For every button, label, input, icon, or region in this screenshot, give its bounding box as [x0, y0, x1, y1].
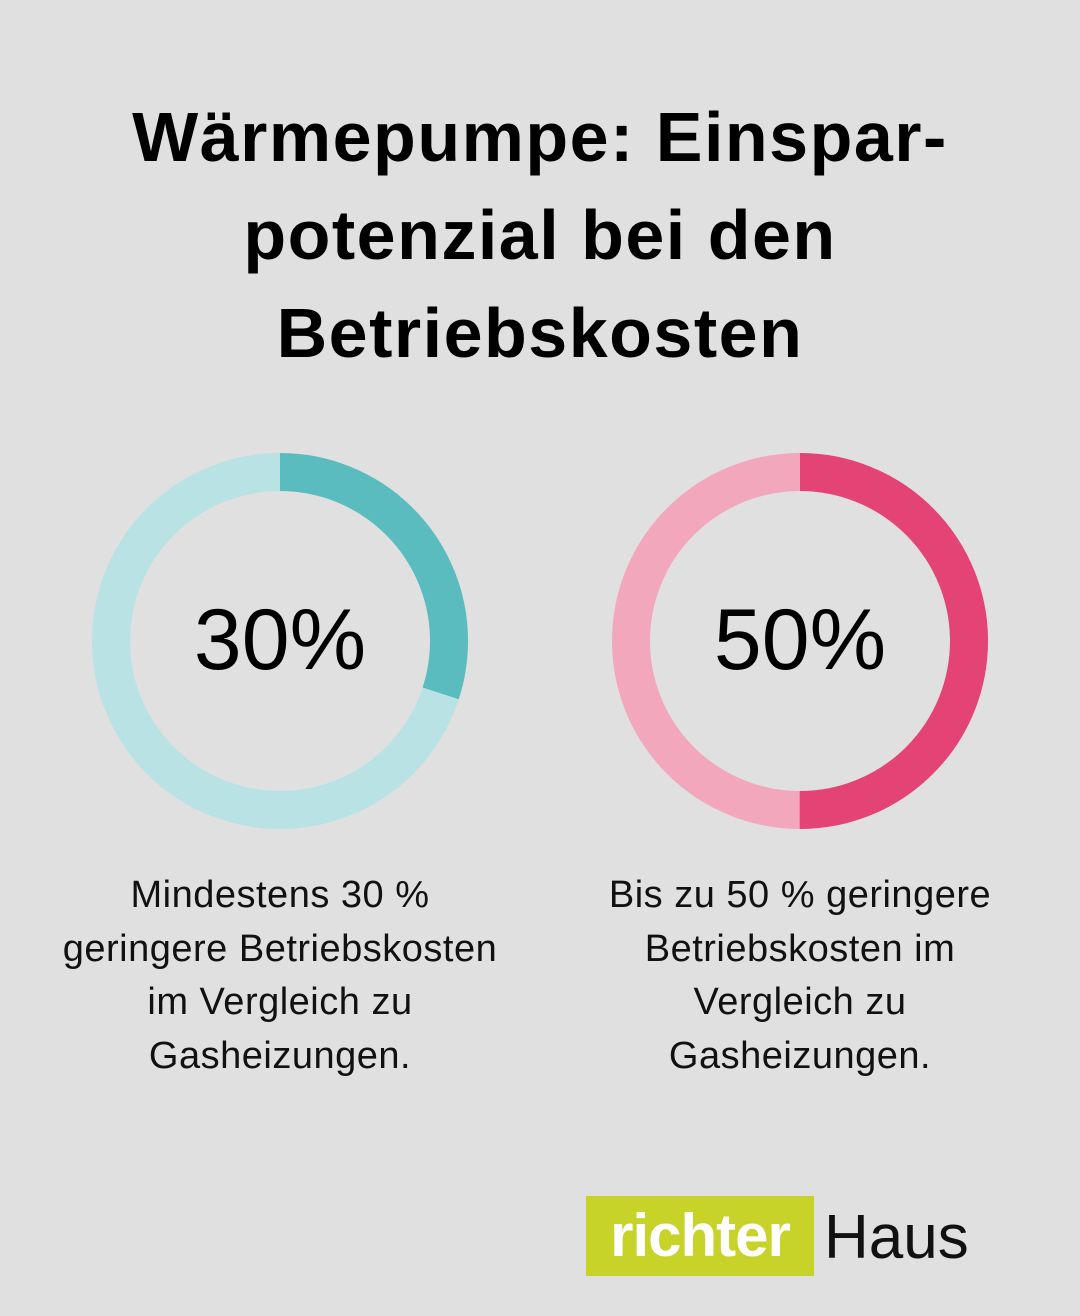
text: left description: Mindestens 30 %	[130, 874, 430, 916]
value: 50%: 50%	[714, 592, 886, 688]
text: right description: Bis zu 50 % geringere	[609, 874, 991, 916]
chart: 30% donut	[92, 453, 468, 829]
text: left description	[63, 874, 497, 1076]
text: left description: Gasheizungen.	[149, 1034, 411, 1076]
text: right description	[609, 874, 991, 1076]
logo	[586, 1196, 969, 1276]
title: Betriebskosten	[277, 294, 803, 372]
title	[132, 98, 948, 372]
title: Wärmepumpe: Einspar-	[132, 98, 948, 176]
logo: richter	[610, 1202, 790, 1269]
chart: 50% donut	[612, 453, 988, 829]
text: right description: Gasheizungen.	[669, 1034, 931, 1076]
text: right description: Vergleich zu	[693, 981, 906, 1023]
logo: Haus	[824, 1203, 969, 1272]
text: left description: geringere Betriebskosten	[63, 928, 497, 970]
text: left description: im Vergleich zu	[147, 981, 413, 1023]
value: 30%: 30%	[194, 592, 366, 688]
title: potenzial bei den	[243, 196, 837, 274]
text: right description: Betriebskosten im	[645, 928, 955, 970]
